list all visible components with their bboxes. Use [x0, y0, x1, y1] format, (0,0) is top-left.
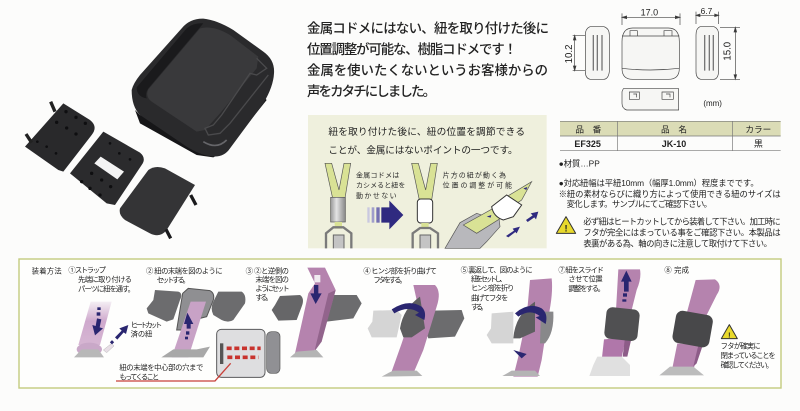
step 5 text: する。: [471, 302, 488, 311]
headline text: [307, 21, 549, 99]
headline text: 金属を使いたくないというお客様からの: [307, 62, 548, 78]
step 3 to 5 column: [272, 266, 553, 377]
warning text: confirm lid closed: 確認してください。: [721, 360, 773, 369]
step 3 text: [246, 266, 290, 302]
opened stopper, left lid: [25, 102, 95, 172]
step 8 text: ⑧ 完成: [664, 266, 690, 275]
inset: cord end detail: [217, 329, 280, 377]
step 2 illustration: [147, 288, 245, 357]
step 5 text: 紐をセットし、: [471, 275, 507, 284]
warning text: フタが完全にはまっている事をご確認下さい。本製品は: [583, 227, 781, 237]
callout: cord end note: 紐の末端を中心部の穴まで: [119, 363, 203, 372]
step 5 text: 曲げてフタを: [471, 293, 508, 302]
opened stopper, right lid: [120, 167, 196, 238]
step 4 text: フタをする。: [373, 276, 407, 285]
step 4 text: ④ ヒンジ部を折り曲げて: [363, 266, 437, 275]
front view with 17.0 dimension: 17.0: [641, 8, 658, 18]
warning note with icon: [556, 217, 781, 248]
panel heading text: 紐を取り付けた後に、紐の位置を調節できる: [328, 126, 525, 138]
heat-cut label: ヒートカット: [131, 321, 162, 330]
callout: cord end note: [116, 363, 231, 381]
step 4 text: [363, 266, 437, 285]
step 2 text: ② 紐の末端を図のように: [146, 266, 223, 275]
warning text: confirm lid closed: 閉まっていることを: [721, 351, 776, 360]
step 3 illustration: [272, 268, 362, 357]
side view with 10.2 dimension: 10.2: [564, 45, 575, 63]
heading: installation method: 装着方法: [32, 266, 62, 275]
metal stopper note: 動かせない: [356, 191, 397, 200]
step 1 text: パーツに紐を通す。: [78, 285, 135, 294]
icon: warning triangle: !: [564, 223, 568, 233]
bottom view: [622, 89, 679, 110]
step 7 illustration: [589, 269, 640, 376]
spec table: [560, 121, 781, 151]
material and width notes: [559, 159, 781, 209]
panel heading text: ことが、金属にはないポイントの一つです。: [328, 144, 518, 156]
step 3 text: ③ ②と逆側の: [246, 266, 289, 275]
icon: warning triangle: [721, 325, 737, 339]
step 7 text: させて位置: [568, 275, 603, 284]
panel: adjustment explanation: [308, 115, 547, 248]
double arrow: adjustment direction: [506, 212, 538, 237]
table row: EF325: [574, 139, 601, 149]
material and width notes: ※紐の素材ならびに織り方によって使用できる紐のサイズは: [559, 189, 781, 199]
side view with 10.2 dimension: [564, 27, 609, 79]
resin stopper note: 位置の調整が可能: [443, 181, 512, 190]
table row: 黒: [754, 139, 763, 149]
product photo: resin cord stopper closed and opened: [25, 19, 274, 238]
step 1 text: ① ストラップ: [68, 266, 107, 275]
step 7 text: [558, 266, 605, 293]
material and width notes: ●対応紐幅は平紐10mm（幅厚1.0mm）程度までです。: [559, 178, 759, 188]
side view with 6.7 and 15.0 dimensions: 6.7: [701, 6, 713, 16]
step 2 text: [146, 266, 223, 285]
material and width notes: 変化します。サンプルにてご確認下さい。: [567, 199, 712, 209]
warning text: 表裏がある為、軸の向きに注意して取付けて下さい。: [583, 238, 772, 248]
step 5 illustration: [487, 278, 553, 377]
table header: 品 名: [661, 123, 687, 134]
callout: cord end note: もってくること: [119, 372, 159, 381]
table row: [574, 139, 763, 149]
material and width notes: ●材質…PP: [559, 159, 600, 169]
metal stopper note: カシメると紐を: [356, 181, 405, 190]
step 1 to 3 column: [32, 266, 290, 381]
resin stopper note: [443, 170, 512, 190]
closed stopper: [132, 19, 274, 157]
metal stopper note: [356, 170, 405, 200]
step 3 text: 末端を図の: [255, 275, 289, 284]
step 3 text: する。: [255, 293, 273, 302]
panel: installation steps: [19, 259, 781, 388]
step 5 text: ⑤ 裏返して、図のように: [461, 266, 533, 275]
warning text: confirm lid closed: フタが確実に: [721, 342, 761, 351]
warning text: 必ず紐はヒートカットしてから装着して下さい。加工時に: [583, 217, 781, 227]
metal stopper note: 金属コドメは: [356, 170, 399, 179]
warning text: [583, 217, 781, 248]
lanyard with resin stopper: [412, 163, 438, 248]
step 5 text: ヒンジ部を折り: [471, 284, 514, 293]
heat-cut label: [131, 321, 162, 339]
icon: warning triangle: [556, 217, 576, 233]
step 8 illustration: [659, 279, 720, 375]
step 2 text: セットする。: [157, 276, 190, 285]
table header: カラー: [745, 124, 771, 134]
lanyard with metal stopper: [325, 163, 351, 248]
headline text: 金属コドメにはない、紐を取り付けた後に: [307, 21, 549, 36]
warning text: confirm lid closed: [721, 342, 776, 369]
table row: JK-10: [662, 139, 686, 149]
step 1 text: [68, 266, 135, 294]
table header: 品 番: [575, 123, 602, 134]
resin stopper note: 片方の紐が動く為: [443, 170, 506, 179]
panel heading text: [328, 126, 525, 156]
step 1 text: 先端に取り付ける: [78, 275, 132, 284]
step 7 text: 調整をする。: [568, 284, 605, 293]
step 7 and 8 column: [558, 266, 776, 376]
step 5 text: [461, 266, 533, 311]
headline text: 位置調整が可能な、樹脂コドメです！: [307, 41, 517, 57]
dimension drawings: [564, 6, 740, 110]
heat-cut label: 済の紐: [131, 330, 153, 339]
opened stopper, hinge body: [70, 132, 144, 205]
step 1 illustration: [74, 302, 128, 357]
arrow: metal to resin: [367, 201, 403, 229]
unit label: (mm): [703, 99, 722, 108]
slanted stopper close-up: [445, 182, 532, 248]
front view with 17.0 dimension: [622, 8, 680, 79]
step 4 illustration: [368, 285, 464, 377]
side view with 6.7 and 15.0 dimensions: [696, 6, 740, 79]
icon: warning triangle: !: [728, 330, 731, 339]
step 3 text: ようにセット: [255, 284, 290, 293]
table header: [575, 123, 771, 134]
headline text: 声をカタチにしました。: [307, 83, 436, 99]
step 7 text: ⑦ 紐をスライド: [558, 266, 604, 275]
side view with 6.7 and 15.0 dimensions: 15.0: [723, 42, 734, 61]
